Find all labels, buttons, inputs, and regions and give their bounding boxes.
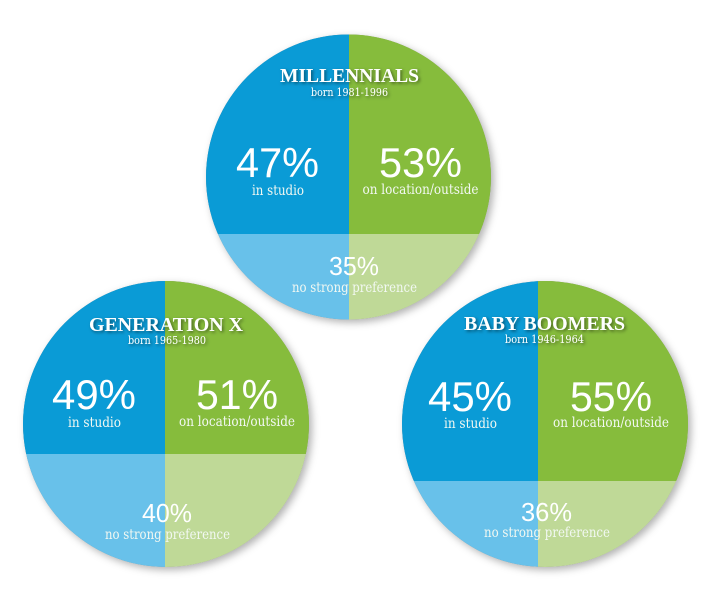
stat: 49%: 49%: [52, 371, 136, 418]
stat: 53%: 53%: [379, 139, 462, 186]
label: on location/outside: on location/outside: [179, 414, 295, 430]
pie quadrants: baby boomers: [395, 275, 695, 574]
stat: 55%: 55%: [570, 373, 652, 420]
stat: 51%: 51%: [196, 371, 278, 418]
subheading: born 1946-1964: born 1946-1964: [505, 332, 584, 346]
heading: generation x: GENERATION X: [89, 314, 244, 336]
label: no strong preference: no strong preference: [484, 525, 610, 541]
label: in studio: in studio: [252, 183, 304, 199]
pie quadrants: millennials: [200, 30, 499, 324]
stat: 36%: 36%: [521, 497, 572, 527]
label: on location/outside: on location/outside: [553, 415, 669, 431]
label: no strong preference: no strong preference: [105, 527, 230, 543]
label: on location/outside: on location/outside: [362, 182, 478, 198]
stat: 47%: 47%: [236, 139, 319, 186]
stat: 35%: 35%: [329, 251, 379, 281]
label: in studio: in studio: [444, 416, 497, 432]
panel: generation x: [15, 275, 315, 574]
heading: baby boomers: BABY BOOMERS: [464, 313, 625, 335]
label: no strong preference: no strong preference: [292, 280, 417, 296]
heading: millennials: MILLENNIALS: [280, 65, 419, 87]
stat: 45%: 45%: [428, 373, 512, 420]
panel: baby boomers: [395, 275, 695, 574]
panel: millennials: [200, 30, 499, 324]
subheading: born 1965-1980: born 1965-1980: [128, 333, 206, 347]
stat: 40%: 40%: [142, 498, 192, 528]
pie quadrants: generation x: [15, 275, 315, 574]
subheading: born 1981-1996: born 1981-1996: [311, 85, 388, 99]
label: in studio: in studio: [68, 415, 121, 431]
